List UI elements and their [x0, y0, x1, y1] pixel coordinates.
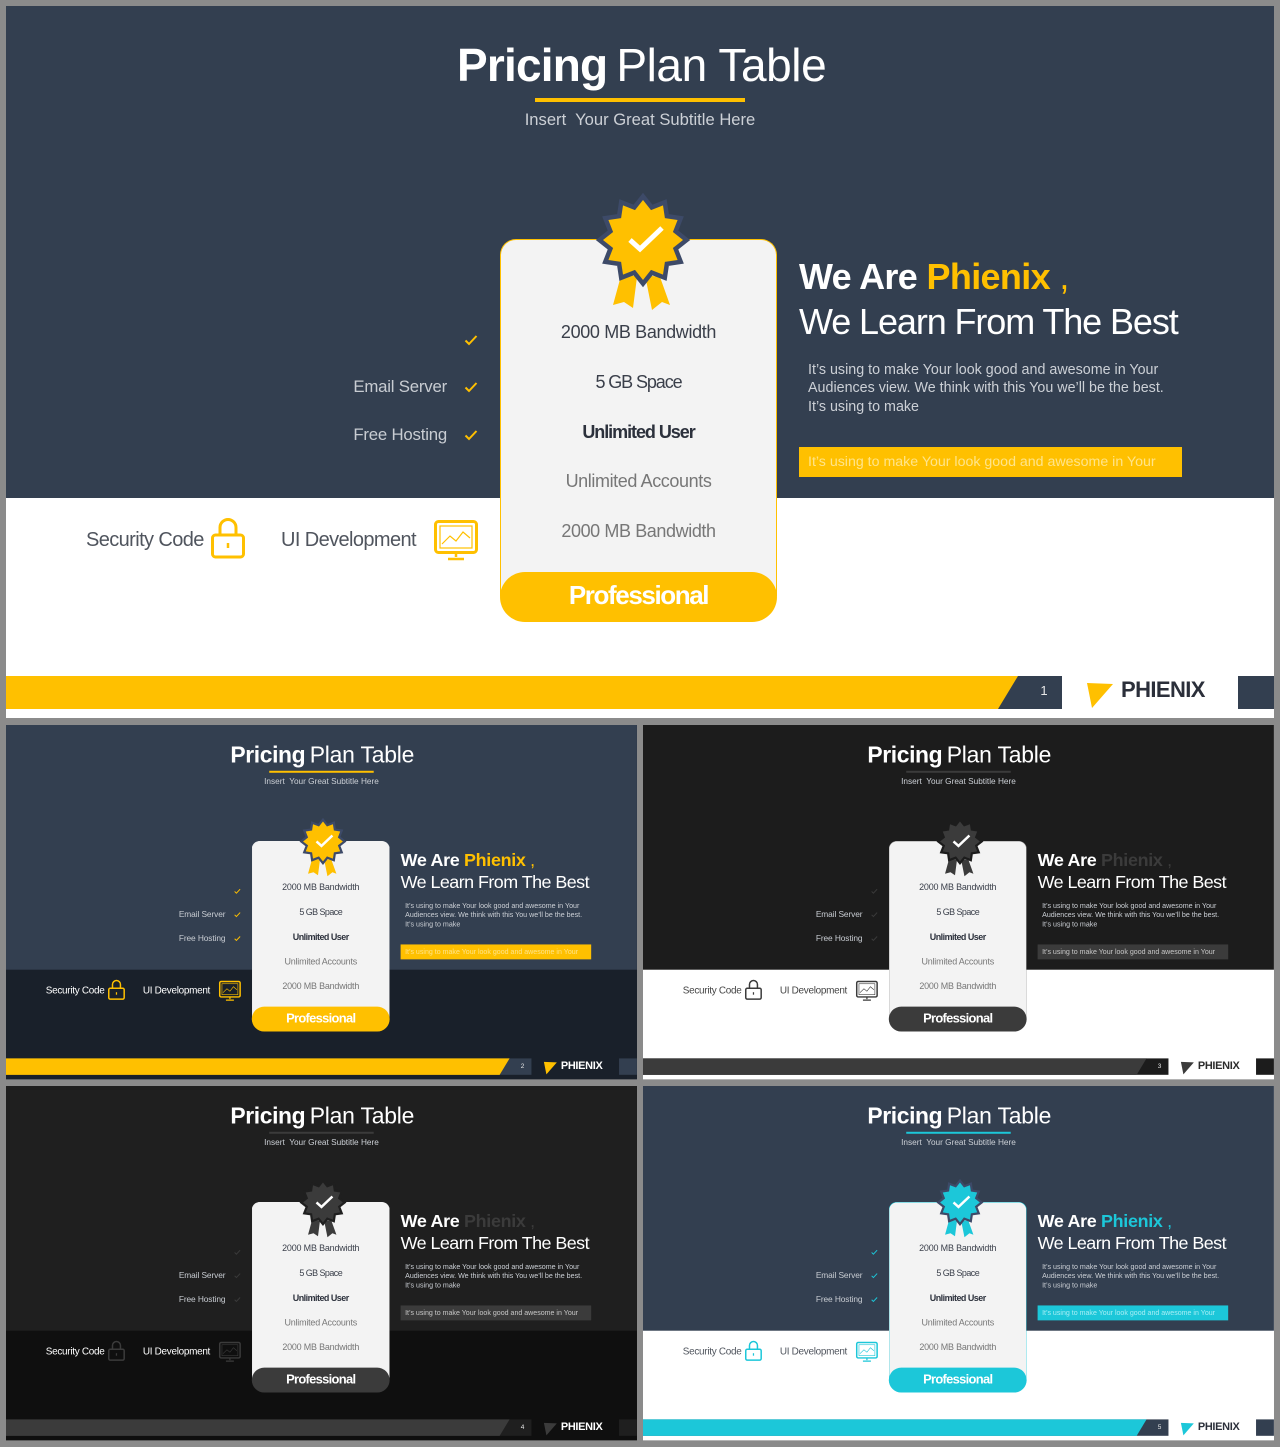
- bottom background panel: [643, 970, 1274, 1079]
- icon: padlock: [745, 1341, 762, 1361]
- card row: bandwidth: 2000 MB Bandwidth: [282, 882, 359, 892]
- subtitle: Insert Your Great Subtitle Here: [901, 777, 1016, 786]
- footer progress bar: [6, 1419, 531, 1436]
- icon: check mark row 1: [234, 1250, 240, 1255]
- plan name button: Professional: [286, 1011, 355, 1026]
- accent strip callout: [401, 944, 591, 959]
- bottom background panel: [643, 1331, 1274, 1440]
- feature label: security code: Security Code: [683, 1346, 741, 1357]
- card row: space: 5 GB Space: [936, 1268, 979, 1278]
- heading line two: We Learn From The Best: [401, 1233, 589, 1253]
- feature label: email server: Email Server: [816, 1271, 862, 1280]
- slide 2: navy with dark lower panel: [6, 725, 637, 1079]
- icon: padlock: [745, 980, 762, 1000]
- icon: monitor with chart: [219, 1342, 241, 1362]
- slide 1: large navy and yellow pricing slide: [6, 6, 1274, 718]
- icon: check mark row 1: [871, 1249, 878, 1256]
- title underline: [269, 771, 374, 773]
- heading line one: We Are Phienix ,: [799, 256, 1069, 297]
- icon: monitor with chart: [218, 980, 241, 1001]
- title: PricingPlan Table: [457, 39, 826, 91]
- icon: check mark row 2: [234, 1274, 240, 1278]
- card row: space: 5 GB Space: [595, 372, 682, 392]
- icon: check mark row 3: [871, 1296, 878, 1303]
- card row: accounts: Unlimited Accounts: [284, 1317, 357, 1327]
- feature label: free hosting: Free Hosting: [816, 933, 862, 943]
- pricing card: [252, 1202, 390, 1380]
- icon: padlock: [108, 980, 125, 1000]
- title underline: [906, 1132, 1011, 1134]
- top background panel: [643, 1086, 1274, 1331]
- card row: bandwidth second: 2000 MB Bandwidth: [282, 981, 359, 991]
- icon: monitor with chart: [856, 1342, 878, 1362]
- card row: bandwidth second: 2000 MB Bandwidth: [919, 1342, 996, 1352]
- feature label: email server: Email Server: [179, 1271, 225, 1280]
- card row: users: Unlimited User: [293, 1293, 349, 1303]
- heading line one: We Are Phienix ,: [401, 1210, 535, 1231]
- accent strip callout: [401, 1305, 591, 1320]
- body paragraph: [1042, 1262, 1219, 1290]
- heading line one: We Are Phienix ,: [1038, 849, 1172, 870]
- body paragraph: It’s using to make: [405, 920, 460, 928]
- title: PricingPlan Table: [230, 741, 414, 767]
- page number: 2: [521, 1062, 524, 1069]
- pricing card: [500, 239, 777, 596]
- feature label: security code: Security Code: [683, 985, 741, 996]
- footer right box: [619, 1419, 637, 1436]
- footer progress bar: [6, 1058, 532, 1075]
- icon: award ribbon badge: [300, 1182, 346, 1238]
- feature label: security code: Security Code: [46, 1346, 104, 1357]
- accent strip callout: It’s using to make Your look good and awesome in Your: [1042, 948, 1215, 956]
- brand name: PHIENIX: [561, 1059, 603, 1071]
- body paragraph: Audiences view. We think with this You we’ll be the best.: [405, 1272, 582, 1280]
- body paragraph: It’s using to make Your look good and awesome in Your: [405, 902, 579, 910]
- page number: 4: [521, 1423, 524, 1430]
- body paragraph: It’s using to make: [1042, 920, 1097, 928]
- icon: check mark row 2: [234, 912, 240, 918]
- plan name button: Professional: [569, 580, 708, 610]
- body paragraph: It’s using to make: [1042, 1281, 1097, 1289]
- title: PricingPlan Table: [867, 741, 1051, 767]
- icon: phienix logo mark: [544, 1062, 557, 1074]
- footer right box: [1256, 1419, 1274, 1436]
- body paragraph: [405, 1262, 582, 1290]
- feature label: free hosting: Free Hosting: [353, 425, 447, 444]
- card row: users: Unlimited User: [930, 1293, 986, 1303]
- icon: check mark row 3: [464, 430, 478, 440]
- icon: phienix logo mark: [1087, 683, 1113, 708]
- card row: bandwidth: 2000 MB Bandwidth: [919, 1243, 996, 1253]
- brand name: PHIENIX: [1198, 1059, 1240, 1071]
- icon: check mark row 3: [234, 936, 240, 942]
- body paragraph: It’s using to make Your look good and awesome in Your: [1042, 1263, 1216, 1271]
- accent strip callout: [1038, 1305, 1228, 1320]
- body paragraph: It’s using to make Your look good and awesome in Your: [808, 362, 1158, 378]
- card row: accounts: Unlimited Accounts: [566, 471, 711, 491]
- page number: 1: [1040, 683, 1048, 698]
- feature label: email server: Email Server: [353, 377, 447, 396]
- heading line two: We Learn From The Best: [1038, 1233, 1226, 1253]
- icon: check mark row 3: [234, 1297, 240, 1302]
- feature label: free hosting: Free Hosting: [179, 933, 225, 943]
- icon: award ribbon badge: [596, 193, 690, 310]
- icon: check mark row 1: [872, 889, 878, 894]
- subtitle: Insert Your Great Subtitle Here: [264, 777, 379, 786]
- feature label: free hosting: Free Hosting: [816, 1294, 862, 1304]
- icon: phienix logo mark: [544, 1423, 557, 1436]
- icon: check mark row 2: [464, 382, 478, 392]
- bottom background panel: [6, 970, 637, 1079]
- plan name button: [889, 1368, 1027, 1393]
- subtitle: Insert Your Great Subtitle Here: [901, 1138, 1016, 1147]
- accent strip callout: It’s using to make Your look good and awesome in Your: [405, 948, 578, 956]
- card row: accounts: Unlimited Accounts: [921, 956, 994, 966]
- card row: bandwidth: 2000 MB Bandwidth: [561, 322, 716, 342]
- accent strip callout: [1038, 944, 1228, 959]
- icon: award ribbon badge: [300, 818, 346, 876]
- card row: bandwidth second: 2000 MB Bandwidth: [282, 1342, 359, 1352]
- pricing card: [889, 841, 1027, 1019]
- card row: accounts: Unlimited Accounts: [284, 956, 357, 966]
- footer progress bar: [6, 676, 1062, 709]
- body paragraph: It’s using to make: [405, 1281, 460, 1289]
- plan name button: Professional: [923, 1011, 992, 1026]
- icon: check mark row 1: [464, 335, 478, 346]
- brand name: PHIENIX: [1198, 1420, 1240, 1432]
- card row: space: 5 GB Space: [299, 1268, 342, 1278]
- card row: space: 5 GB Space: [299, 907, 342, 917]
- body paragraph: [808, 362, 1164, 415]
- body paragraph: It’s using to make Your look good and awesome in Your: [1042, 902, 1216, 910]
- accent strip callout: [799, 447, 1182, 477]
- pricing card: [252, 841, 390, 1019]
- slide 3: black top with white lower panel: [643, 725, 1274, 1079]
- pricing card: [889, 1202, 1027, 1380]
- feature label: security code: Security Code: [46, 985, 104, 996]
- page number: 3: [1158, 1062, 1161, 1069]
- card row: bandwidth second: 2000 MB Bandwidth: [919, 981, 996, 991]
- feature label: ui development: UI Development: [281, 529, 416, 551]
- accent strip callout: It’s using to make Your look good and awesome in Your: [1042, 1309, 1215, 1317]
- bottom background panel: [6, 1331, 637, 1440]
- body paragraph: [1042, 902, 1219, 928]
- subtitle: Insert Your Great Subtitle Here: [525, 110, 755, 129]
- accent strip callout: It’s using to make Your look good and awesome in Your: [405, 1309, 578, 1317]
- title: PricingPlan Table: [230, 1102, 414, 1128]
- plan name button: [889, 1007, 1027, 1032]
- top background panel: [643, 725, 1274, 970]
- plan name button: [252, 1007, 390, 1032]
- heading line one: We Are Phienix ,: [401, 849, 535, 870]
- icon: phienix logo mark: [1180, 1062, 1194, 1074]
- title underline: [535, 98, 745, 102]
- footer progress bar: [643, 1058, 1168, 1075]
- icon: check mark row 2: [871, 1272, 878, 1279]
- card row: users: Unlimited User: [582, 422, 695, 442]
- heading line two: We Learn From The Best: [799, 301, 1178, 342]
- body paragraph: [405, 902, 582, 928]
- footer progress bar: [643, 1419, 1168, 1436]
- card row: users: Unlimited User: [930, 932, 986, 942]
- icon: monitor with chart: [434, 520, 478, 560]
- card row: accounts: Unlimited Accounts: [921, 1317, 994, 1327]
- icon: monitor with chart: [856, 980, 878, 1001]
- icon: check mark row 3: [872, 936, 878, 941]
- body paragraph: It’s using to make Your look good and awesome in Your: [405, 1263, 579, 1271]
- plan name button: [500, 572, 777, 622]
- body paragraph: Audiences view. We think with this You we’ll be the best.: [405, 911, 582, 919]
- icon: padlock: [108, 1340, 125, 1361]
- brand name: PHIENIX: [1121, 677, 1205, 702]
- feature label: ui development: UI Development: [780, 1346, 847, 1357]
- plan name button: Professional: [923, 1372, 992, 1387]
- icon: padlock: [211, 518, 245, 558]
- body paragraph: Audiences view. We think with this You we’ll be the best.: [1042, 911, 1219, 919]
- card row: bandwidth second: 2000 MB Bandwidth: [561, 521, 716, 541]
- card row: users: Unlimited User: [293, 932, 349, 942]
- icon: award ribbon badge: [936, 822, 984, 876]
- footer right box: [619, 1058, 637, 1075]
- icon: phienix logo mark: [1181, 1423, 1194, 1436]
- slide 4: all black theme: [6, 1086, 637, 1440]
- feature label: ui development: UI Development: [780, 985, 847, 996]
- body paragraph: Audiences view. We think with this You we’ll be the best.: [808, 380, 1164, 396]
- heading line two: We Learn From The Best: [1038, 872, 1226, 892]
- brand name: PHIENIX: [561, 1420, 603, 1432]
- feature label: email server: Email Server: [816, 910, 862, 919]
- heading line two: We Learn From The Best: [401, 872, 589, 892]
- subtitle: Insert Your Great Subtitle Here: [264, 1138, 379, 1147]
- feature label: free hosting: Free Hosting: [179, 1294, 225, 1304]
- feature label: ui development: UI Development: [143, 985, 210, 996]
- icon: award ribbon badge: [937, 1178, 986, 1240]
- card row: bandwidth: 2000 MB Bandwidth: [919, 882, 996, 892]
- top background panel: [6, 725, 637, 970]
- accent strip callout: It’s using to make Your look good and awesome in Your: [808, 454, 1156, 470]
- feature label: email server: Email Server: [179, 910, 225, 919]
- top background panel: [6, 6, 1274, 498]
- body paragraph: It’s using to make: [808, 399, 919, 415]
- icon: check mark row 1: [234, 888, 240, 894]
- page number: 5: [1158, 1423, 1161, 1430]
- heading line one: We Are Phienix ,: [1038, 1210, 1172, 1231]
- feature label: ui development: UI Development: [143, 1346, 210, 1357]
- plan name button: [252, 1368, 390, 1393]
- icon: check mark row 2: [872, 912, 878, 917]
- footer right box: [1256, 1058, 1274, 1075]
- title underline: [906, 771, 1011, 773]
- card row: bandwidth: 2000 MB Bandwidth: [282, 1243, 359, 1253]
- title underline: [269, 1132, 374, 1134]
- title: PricingPlan Table: [867, 1102, 1051, 1128]
- body paragraph: Audiences view. We think with this You we’ll be the best.: [1042, 1272, 1219, 1280]
- plan name button: Professional: [286, 1372, 355, 1387]
- card row: space: 5 GB Space: [936, 907, 979, 917]
- footer right box: [1238, 676, 1274, 709]
- slide 5: navy and cyan theme: [643, 1086, 1274, 1440]
- feature label: security code: Security Code: [86, 529, 204, 551]
- bottom background panel: [6, 498, 1274, 718]
- top background panel: [6, 1086, 637, 1331]
